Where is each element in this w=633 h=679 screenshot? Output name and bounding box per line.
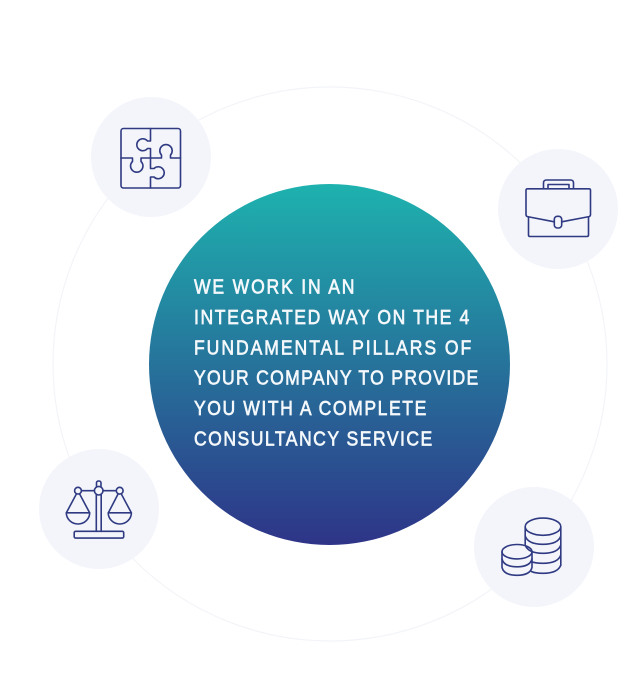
central text: YOUR COMPANY TO PROVIDE — [194, 367, 478, 389]
icon: scales in circle — [39, 449, 159, 569]
central text: YOU WITH A COMPLETE — [194, 397, 426, 419]
central text: CONSULTANCY SERVICE — [194, 427, 432, 450]
icon: briefcase in circle — [498, 149, 618, 269]
orbit ring — [53, 87, 607, 641]
central text — [194, 275, 478, 450]
icon: coin stacks in circle — [474, 487, 594, 607]
icon: puzzle in circle — [91, 97, 211, 217]
central text: FUNDAMENTAL PILLARS OF — [194, 336, 471, 359]
central gradient circle — [149, 184, 510, 545]
central text: INTEGRATED WAY ON THE 4 — [194, 306, 469, 328]
central text: WE WORK IN AN — [194, 275, 355, 298]
